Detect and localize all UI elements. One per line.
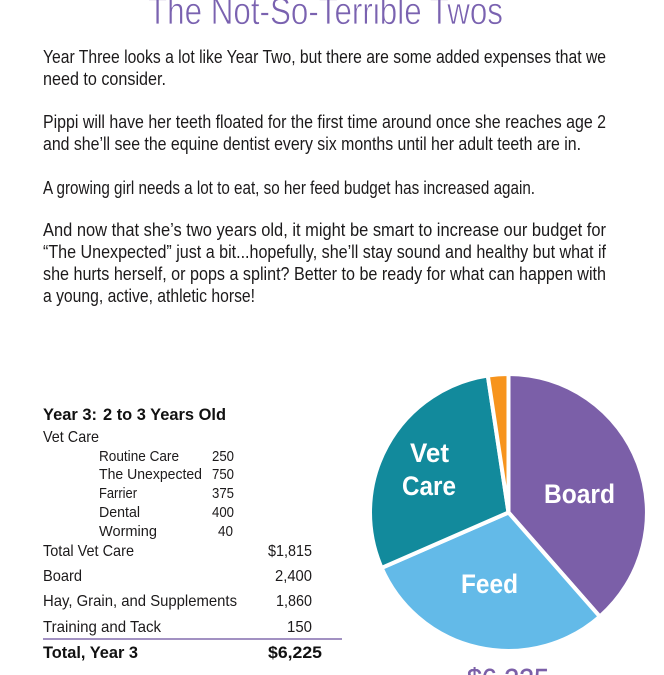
vet care items: 250	[212, 448, 234, 465]
vet care items: The Unexpected	[99, 466, 202, 483]
slice: vet care	[370, 376, 508, 568]
total row: $6,225	[268, 643, 322, 662]
table rows	[43, 543, 312, 636]
table rows: 150	[287, 619, 312, 636]
vet care items: 750	[212, 466, 234, 483]
table rows: Total Vet Care	[43, 543, 134, 560]
intro text block: she hurts herself, or pops a splint? Better to be ready for what can happen with	[43, 264, 606, 284]
pie labels: Care	[402, 471, 456, 501]
pie labels: Feed	[461, 569, 518, 599]
vet care items: 40	[218, 523, 233, 540]
table heading	[43, 405, 226, 424]
vet care items: Worming	[99, 523, 157, 540]
budget table	[43, 405, 342, 662]
table rows: Board	[43, 568, 82, 585]
intro text block: and she’ll see the equine dentist every six months until her adult teeth are in.	[43, 134, 581, 154]
table rows: 1,860	[276, 593, 312, 610]
intro text block: “The Unexpected” just a bit...hopefully, she’ll stay sound and healthy but what if	[43, 242, 607, 262]
pie labels: Board	[544, 479, 615, 509]
total row	[43, 643, 322, 662]
intro text block	[43, 47, 607, 306]
table rows: $1,815	[268, 543, 312, 560]
table heading: 2 to 3 Years Old	[103, 405, 226, 424]
vet care label: Vet Care	[43, 429, 99, 446]
vet care items: Routine Care	[99, 448, 179, 465]
vet care items: 375	[212, 485, 234, 502]
intro text block: a young, active, athletic horse!	[43, 286, 255, 306]
intro text block: Pippi will have her teeth floated for the first time around once she reaches age 2	[43, 112, 606, 132]
slice: feed	[382, 512, 600, 651]
slice: training and tack	[488, 374, 508, 512]
vet care items: Farrier	[99, 485, 137, 502]
table rows: 2,400	[275, 568, 312, 585]
intro text block: A growing girl needs a lot to eat, so her feed budget has increased again.	[43, 178, 535, 198]
total row: Total, Year 3	[43, 643, 138, 662]
table rows: Training and Tack	[43, 619, 162, 636]
intro text block: need to consider.	[43, 69, 166, 89]
pie labels	[402, 438, 615, 599]
pie chart	[370, 374, 647, 651]
slice: board	[508, 374, 647, 617]
vet care items: Dental	[99, 504, 140, 521]
table rows: Hay, Grain, and Supplements	[43, 593, 237, 610]
vet care items	[99, 448, 234, 540]
table heading: Year 3:	[43, 405, 97, 424]
pie labels: Vet	[410, 438, 449, 468]
intro text block: And now that she’s two years old, it might be smart to increase our budget for	[43, 220, 606, 240]
vet care items: 400	[212, 504, 234, 521]
